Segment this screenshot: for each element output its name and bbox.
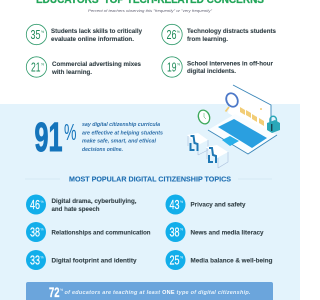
concern: 35% — [26, 24, 143, 45]
topic: 38%: Relationships and communication — [52, 230, 151, 236]
concern: 26%: Technology distracts students — [187, 29, 277, 35]
laptop base — [208, 114, 277, 154]
stat description — [82, 122, 163, 153]
topic: 46%: % — [40, 200, 44, 204]
topic: 25%: 25 — [170, 253, 180, 268]
concern: 26%: 26 — [166, 27, 176, 42]
concern: 21%: % — [41, 62, 44, 66]
topic: 33%: 33 — [30, 253, 40, 268]
concern: 19%: 19 — [167, 60, 176, 75]
stat description: are effective at helping students — [82, 130, 163, 136]
banner: of educators are teaching at least ONE type of digital citizenship. — [64, 290, 251, 296]
concern: 19%: % — [177, 62, 180, 66]
topic: 33%: Digital footprint and identity — [52, 258, 137, 264]
keyboard — [218, 119, 267, 148]
illustration: laptop and desks — [187, 85, 280, 168]
topic: 46%: Digital drama, cyberbullying, — [52, 199, 137, 205]
topic: 38% news: 38 — [170, 225, 180, 240]
topic: 46%: and hate speech — [52, 207, 100, 213]
topic: 46% — [26, 194, 137, 214]
concern: 19%: School intervenes in off-hour — [187, 62, 274, 68]
stat description: say digital citizenship curricula — [82, 122, 160, 128]
panel: topics — [26, 194, 273, 270]
heading: topics: MOST POPULAR DIGITAL CITIZENSHIP TOPICS — [69, 176, 231, 184]
desk 2 — [206, 145, 228, 168]
concern: 19%: digital incidents. — [187, 69, 236, 75]
topic: 38% news — [166, 222, 264, 242]
concern: 35%: Students lack skills to critically — [51, 29, 143, 35]
topic: 33%: % — [40, 256, 44, 260]
concern: 35%: % — [41, 30, 44, 34]
clock — [196, 109, 212, 125]
banner — [26, 282, 273, 300]
stat: 91%: 91 — [34, 114, 62, 160]
topic: 25% — [166, 250, 273, 270]
stat description: decisions online. — [82, 147, 123, 153]
banner: % — [60, 288, 63, 292]
concern: 26% — [162, 24, 277, 45]
topic: 38%: 38 — [30, 225, 40, 240]
concern: 19% — [162, 57, 274, 77]
topic: 38% news: News and media literacy — [190, 230, 264, 236]
topic: 25%: % — [180, 256, 183, 260]
topic: 43%: % — [180, 200, 183, 204]
topic: 25%: Media balance & well-being — [190, 258, 273, 264]
topic: 46%: 46 — [30, 197, 40, 212]
touchpad — [222, 136, 239, 146]
concern: 21% — [26, 57, 142, 77]
concern: 21%: Commercial advertising mixes — [52, 62, 142, 68]
stat description: make safe, smart, and ethical — [82, 139, 156, 145]
concern: 21%: with learning. — [51, 70, 92, 76]
laptop screen — [228, 85, 271, 138]
stat: 91%: % — [64, 119, 76, 145]
topic: 38% news: % — [180, 228, 183, 232]
subtitle: Percent of teachers observing this "frequently" or "very frequently" — [88, 9, 213, 13]
desk 1 — [187, 133, 208, 155]
concern: 35%: evaluate online information. — [51, 37, 134, 43]
panel: concerns — [26, 24, 277, 77]
banner: 72 — [49, 284, 60, 300]
topic: 43%: Privacy and safety — [190, 202, 246, 208]
panel: blue background — [0, 104, 300, 300]
topic: 38%: % — [40, 228, 44, 232]
magnifier — [224, 91, 240, 112]
topic: 33% — [26, 250, 137, 270]
concern: 35%: 35 — [30, 27, 40, 42]
topic: 38% — [26, 222, 151, 242]
topic: 43%: 43 — [170, 197, 180, 212]
topic: 43% — [166, 194, 246, 214]
password squares — [240, 107, 264, 126]
padlock — [267, 116, 280, 133]
concern: 26%: from learning. — [187, 37, 228, 43]
concern: 26%: % — [177, 30, 180, 34]
concern: 21%: 21 — [31, 60, 40, 75]
